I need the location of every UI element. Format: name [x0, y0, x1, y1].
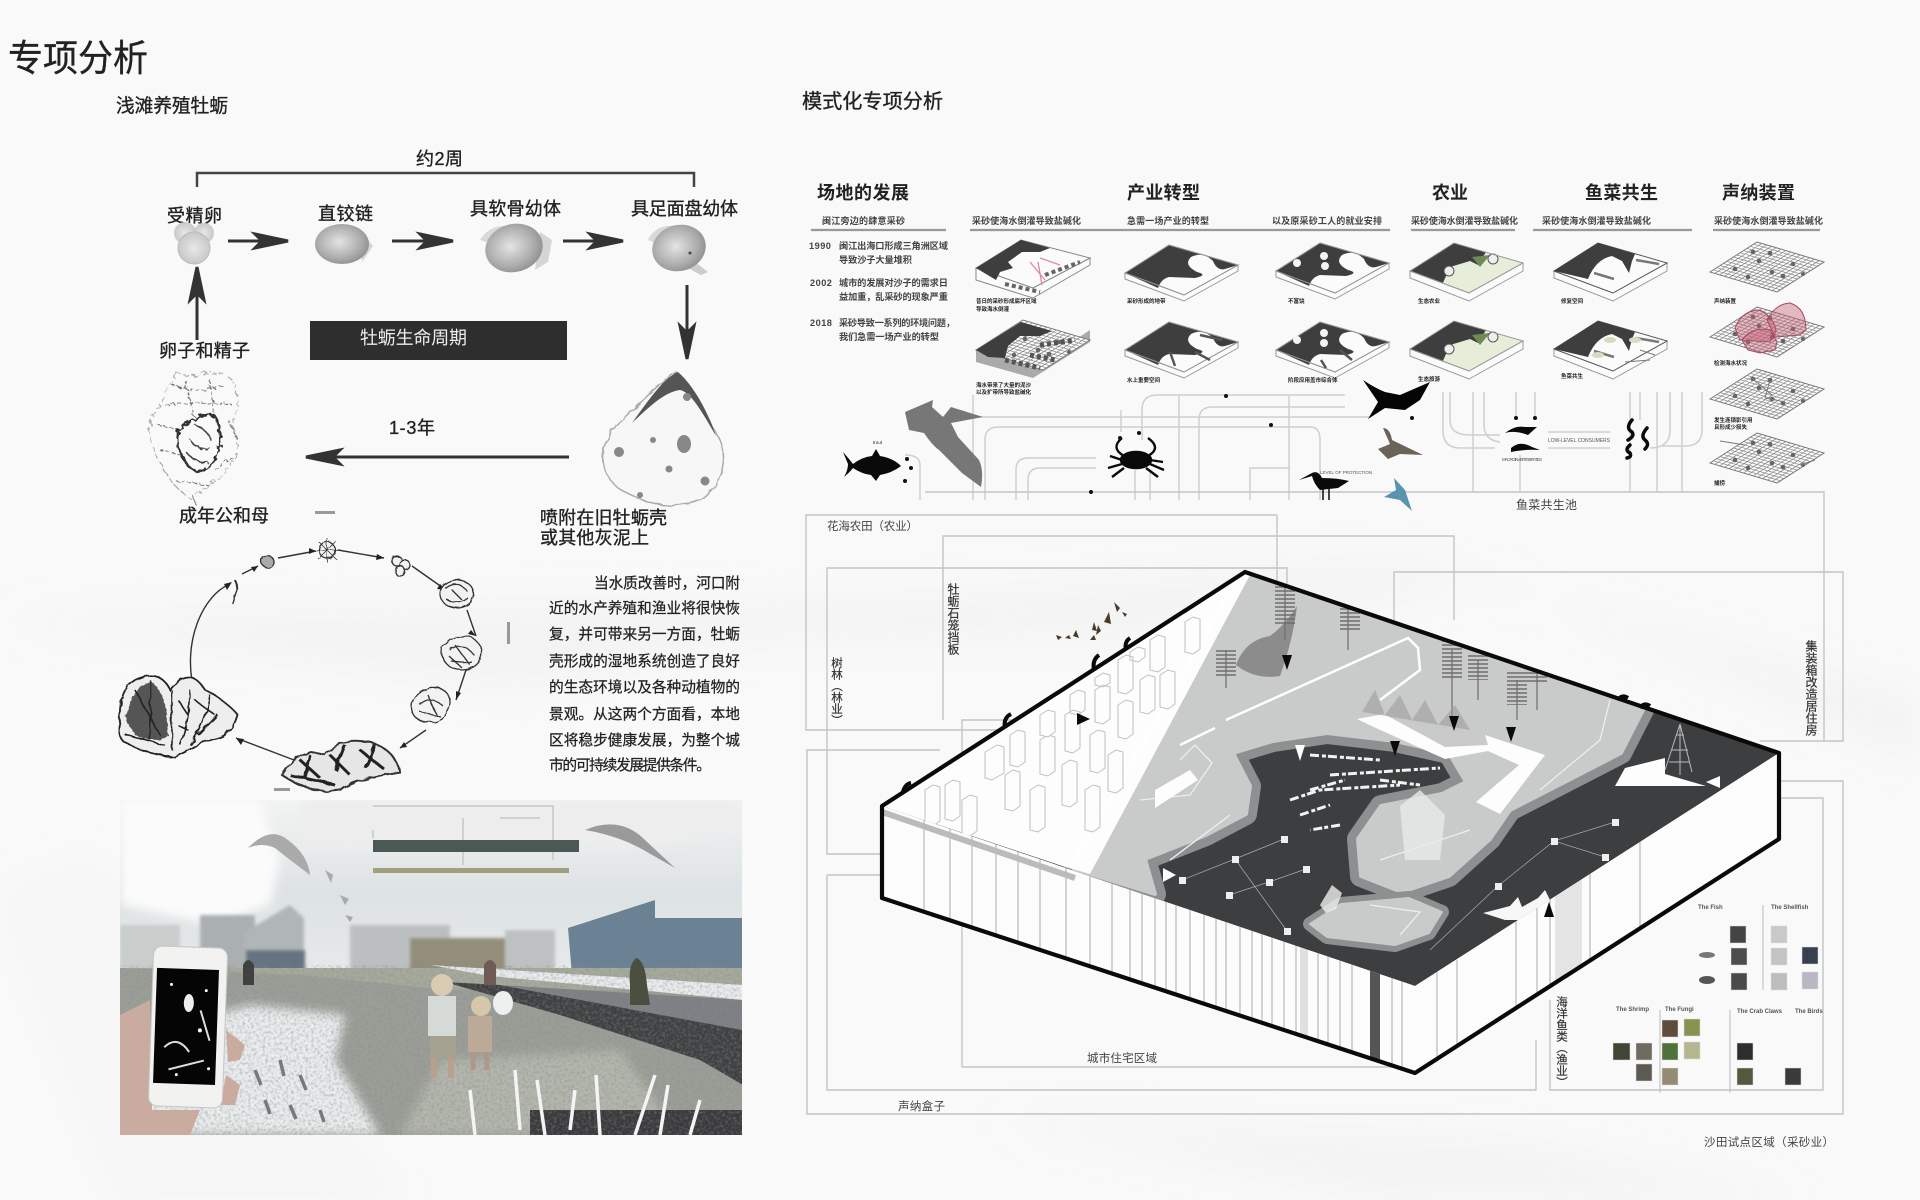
panel: food web animals	[843, 380, 1648, 511]
road lines	[1070, 636, 1422, 868]
text block: water quality paragraph: 近的水产养殖和渔业将很快恢	[549, 600, 740, 617]
text block: timeline: 2002	[810, 278, 832, 288]
panel: tile captions: 检测海水状况	[1714, 359, 1748, 367]
panel: sub headings: 急需一场产业的转型	[1127, 215, 1209, 226]
flow arrows black	[1077, 655, 1516, 756]
icon: worms	[1627, 420, 1648, 458]
tile: site 2	[976, 320, 1090, 378]
species labels: The Fungi	[1665, 1007, 1694, 1013]
text block: timeline: 导致沙子大量堆积	[839, 254, 912, 265]
text block: timeline: 我们急需一场产业的转型	[839, 331, 939, 342]
text block: timeline: 益加重，乱采砂的现象严重	[839, 291, 948, 302]
label: LEVEL OF PROTECTION	[1320, 470, 1372, 475]
label: attached to old oyster shell: 或其他灰泥上	[540, 528, 649, 548]
label: MACROINVERTEBRATES	[1502, 457, 1542, 462]
fence	[530, 1110, 743, 1135]
illustration: spat on shell	[602, 372, 723, 505]
heading: 农业	[1432, 183, 1468, 203]
panel: sub headings: 以及原采砂工人的就业安排	[1272, 215, 1382, 226]
label: sonar box: 声纳盒子	[898, 1099, 945, 1113]
stage: pediveliger larva: 具足面盘幼体	[631, 199, 738, 219]
panel: sub headings: 采砂使海水倒灌导致盐碱化	[1411, 215, 1518, 226]
photo: wetland scene with phone	[120, 800, 743, 1135]
white fish	[1483, 890, 1550, 920]
icon: fish	[843, 449, 901, 481]
network lines	[905, 392, 1702, 500]
land	[1074, 571, 1645, 894]
top face	[882, 571, 1779, 986]
tile: farmland	[1410, 243, 1523, 301]
panel: tile captions: 以及扩带所导致盐碱化	[976, 388, 1032, 396]
panel: tile captions: 生态农业	[1418, 297, 1441, 305]
left side face	[882, 806, 1415, 1073]
shrimp swatches	[1613, 1043, 1652, 1081]
buildings	[925, 617, 1200, 836]
text block: water quality paragraph: 市的可持续发展提供条件。	[549, 757, 711, 774]
text block: timeline: 1990	[809, 241, 831, 251]
grass highlight	[400, 1050, 680, 1135]
tile: sonar 2 with domes	[1710, 303, 1824, 357]
ship and tower	[1615, 724, 1706, 786]
text block: water quality paragraph	[549, 575, 740, 774]
fish in water	[255, 1060, 324, 1122]
label: one to three years: 1-3年	[389, 418, 435, 438]
label: forest: 树林（林业）	[830, 656, 843, 726]
species labels: The Birds	[1795, 1009, 1823, 1015]
panel: tile captions: 生态旅游	[1418, 375, 1441, 383]
ground	[120, 968, 743, 1135]
birds	[248, 824, 675, 922]
white platform	[1357, 714, 1545, 814]
stage: fertilized egg	[167, 206, 222, 264]
icon: macroinvertebrates	[1505, 427, 1540, 452]
stage: fertilized egg: 受精卵	[167, 206, 222, 226]
arrow: up	[190, 267, 204, 340]
tile: bay with circles and piers	[1276, 322, 1389, 378]
panel: tile captions: 声纳装置	[1714, 297, 1737, 305]
phone	[148, 946, 228, 1108]
text block: water quality paragraph: 壳形成的湿地系统创造了良好	[549, 653, 740, 670]
stage: straight-hinge larva	[315, 204, 373, 264]
icon: crab	[1108, 438, 1164, 477]
small caption marks	[274, 511, 510, 791]
panel: tile captions: 昔日的采砂形成腐坏区域	[976, 297, 1037, 305]
tile: aquaponics 2	[1554, 321, 1667, 379]
tile: sonar 1	[1710, 242, 1824, 292]
ring arrowheads	[224, 548, 476, 748]
text block: timeline: 闽江出海口形成三角洲区域	[839, 240, 948, 251]
person	[243, 960, 254, 985]
panel: tile captions: 水上重要空间	[1127, 376, 1161, 384]
panel: tile captions: 修复空间	[1561, 297, 1584, 305]
right side stripes	[1436, 842, 1640, 1057]
noise	[120, 965, 742, 1135]
crab and bird swatches	[1737, 1043, 1801, 1085]
panel: tile captions: 不富饶	[1288, 297, 1305, 305]
chart: oyster growth ring	[119, 511, 510, 791]
trees	[1226, 580, 1537, 722]
hand	[120, 1000, 245, 1135]
children	[428, 974, 513, 1078]
text block: water quality paragraph: 当水质改善时，河口附	[594, 575, 740, 592]
blue pavilion	[568, 900, 743, 975]
panel: tile captions: 且形成少损失	[1714, 423, 1748, 431]
panel: tile captions: 采砂形成的地带	[1127, 297, 1166, 305]
label: sand field pilot: 沙田试点区域（采砂业）	[1704, 1136, 1834, 1149]
arrow: left	[306, 450, 569, 464]
heading: 鱼菜共生	[1585, 182, 1658, 203]
white reeds	[470, 1070, 700, 1135]
gravel	[500, 985, 743, 1030]
text block: timeline: 城市的发展对沙子的需求日	[839, 277, 948, 288]
flow arrows white	[1163, 745, 1720, 882]
label box: oyster life cycle	[310, 321, 567, 360]
panel: oyster life cycle diagram	[150, 149, 738, 548]
icon: sandpiper	[1299, 472, 1349, 500]
group: outer region boxes	[806, 492, 1843, 1114]
label box: oyster life cycle: 牡蛎生命周期	[360, 328, 467, 348]
tile: aquaponics	[1554, 243, 1667, 301]
label: urban residential: 城市住宅区域	[1087, 1051, 1158, 1065]
text block: water quality paragraph: 的生态环境以及各种动植物的	[549, 678, 740, 696]
icon: blue bird	[1384, 478, 1412, 511]
tile: bay with circles	[1276, 243, 1389, 299]
text block: water quality paragraph: 复，并可带来另一方面，牡蛎	[549, 625, 740, 643]
person	[630, 958, 650, 1005]
panel: sub headings: 采砂使海水倒灌导致盐碱化	[972, 215, 1081, 226]
buoys and cables	[1179, 819, 1619, 950]
left side stripes	[884, 810, 1402, 1067]
big oyster cluster	[119, 676, 238, 757]
reeds	[1362, 690, 1470, 730]
heading: pattern analysis: 模式化专项分析	[802, 90, 943, 113]
heading: 声纳装置	[1722, 182, 1795, 203]
tile: sonar 4	[1710, 433, 1824, 483]
text block: water quality paragraph: 景观。从这两个方面看，本地	[549, 706, 740, 723]
outline	[882, 572, 1779, 1073]
outline bumps	[903, 638, 1650, 792]
icon: brown bird	[1378, 428, 1423, 459]
panel: tile captions: 阶段应用盖市综合体	[1288, 376, 1338, 384]
species labels: The Shrimp	[1616, 1007, 1649, 1013]
label: flower farmland: 花海农田（农业）	[827, 519, 918, 533]
label: adult male and female: 成年公和母	[179, 506, 269, 526]
panel: sub headings: 采砂使海水倒灌导致盐碱化	[1542, 215, 1651, 226]
icon: black bird	[1363, 380, 1430, 419]
species labels: The Fish	[1698, 905, 1723, 911]
species labels: The Crab Claws	[1737, 1009, 1783, 1015]
heading: 产业转型	[1127, 183, 1200, 203]
ring arrows	[190, 550, 476, 760]
panel: tile captions	[976, 297, 1753, 487]
label: trout	[873, 440, 883, 445]
text block: timeline: 2018	[810, 318, 832, 328]
tile: sonar 3	[1710, 369, 1824, 419]
species labels: The Shellfish	[1771, 905, 1809, 911]
species labels	[1616, 905, 1823, 1015]
label: about two weeks: 约2周	[416, 149, 463, 169]
panel: iso tiles	[976, 240, 1824, 483]
panel: tile captions: 鱼菜共生	[1561, 372, 1584, 380]
stage: veliger larva: 具软骨幼体	[470, 199, 561, 219]
panel: tile captions: 海水带来了大量的泥沙	[976, 381, 1032, 389]
arrow	[392, 234, 453, 248]
icon: pelican	[905, 400, 983, 487]
panel: sub headings: 闽江旁边的肆意采砂	[822, 215, 905, 226]
tile: bay	[1125, 245, 1238, 301]
path	[430, 965, 743, 1000]
panel: tile captions: 发生连锁影引用	[1714, 416, 1753, 424]
label: oyster gabion: 牡蛎石笼挡板	[946, 582, 960, 656]
fungi swatches	[1662, 1019, 1700, 1085]
right side face	[1415, 753, 1779, 1073]
stage: straight-hinge larva: 直铰链	[318, 204, 373, 224]
label: attached to old oyster shell	[540, 508, 667, 548]
island	[1310, 898, 1442, 945]
fish swatches	[1699, 926, 1747, 990]
stage: veliger larva	[470, 199, 561, 279]
distant person	[484, 960, 496, 985]
land rim	[1063, 710, 1654, 901]
text block: water quality paragraph: 区将稳步健康发展，为整个城	[549, 732, 740, 749]
clouds	[300, 800, 742, 852]
shellfish swatches	[1771, 926, 1818, 990]
heading: oyster farming: 浅滩养殖牡蛎	[116, 95, 228, 117]
pond	[1236, 606, 1297, 677]
island rim	[1310, 898, 1442, 945]
arrow up	[1544, 902, 1554, 917]
sky	[120, 800, 742, 970]
bracket: about two weeks	[197, 173, 694, 187]
heading: 场地的发展	[817, 182, 909, 203]
gabion	[445, 982, 743, 1085]
label: attached to old oyster shell: 喷附在旧牡蛎壳	[540, 508, 667, 528]
stage: pediveliger larva	[631, 199, 738, 277]
label: fish vegetable pool: 鱼菜共生池	[1516, 498, 1577, 512]
flock of birds	[1056, 602, 1127, 640]
ring stage sketches	[233, 538, 482, 791]
chart: isometric site model	[882, 571, 1779, 1090]
sea	[884, 712, 1777, 986]
title: 专项分析	[8, 38, 148, 79]
panel: section headings	[817, 182, 1795, 203]
tile: farmland 2	[1410, 321, 1523, 379]
text block: timeline	[809, 240, 955, 342]
arrow: down	[680, 285, 694, 359]
label: container housing: 集装箱改造居住房	[1804, 639, 1818, 736]
urban white band	[882, 572, 1250, 874]
panel: tile captions: 捕捞	[1714, 479, 1726, 487]
panel: sub headings	[811, 215, 1823, 230]
water	[120, 1005, 380, 1135]
section diagram	[373, 806, 579, 873]
separators	[1660, 905, 1763, 1093]
flow dots	[903, 394, 1537, 494]
foliage glare	[120, 800, 280, 925]
arrow	[563, 234, 623, 248]
text block: timeline: 采砂导致一系列的环境问题，	[839, 317, 955, 328]
panel: tile captions: 导致海水倒灌	[976, 305, 1010, 313]
lake splashes	[1290, 755, 1440, 830]
label: eggs and sperm: 卵子和精子	[159, 341, 250, 361]
label: LOW-LEVEL CONSUMERS	[1548, 438, 1611, 444]
arrow	[228, 234, 288, 248]
panel: species legend	[1613, 905, 1823, 1093]
distant buildings	[120, 904, 556, 968]
illustration: adult oyster	[150, 372, 238, 505]
tile: site 1	[976, 240, 1090, 298]
tile: bay with piers	[1125, 322, 1238, 378]
label: marine fish: 海洋鱼类（渔业）	[1555, 995, 1568, 1088]
panel: sub headings: 采砂使海水倒灌导致盐碱化	[1714, 215, 1823, 226]
